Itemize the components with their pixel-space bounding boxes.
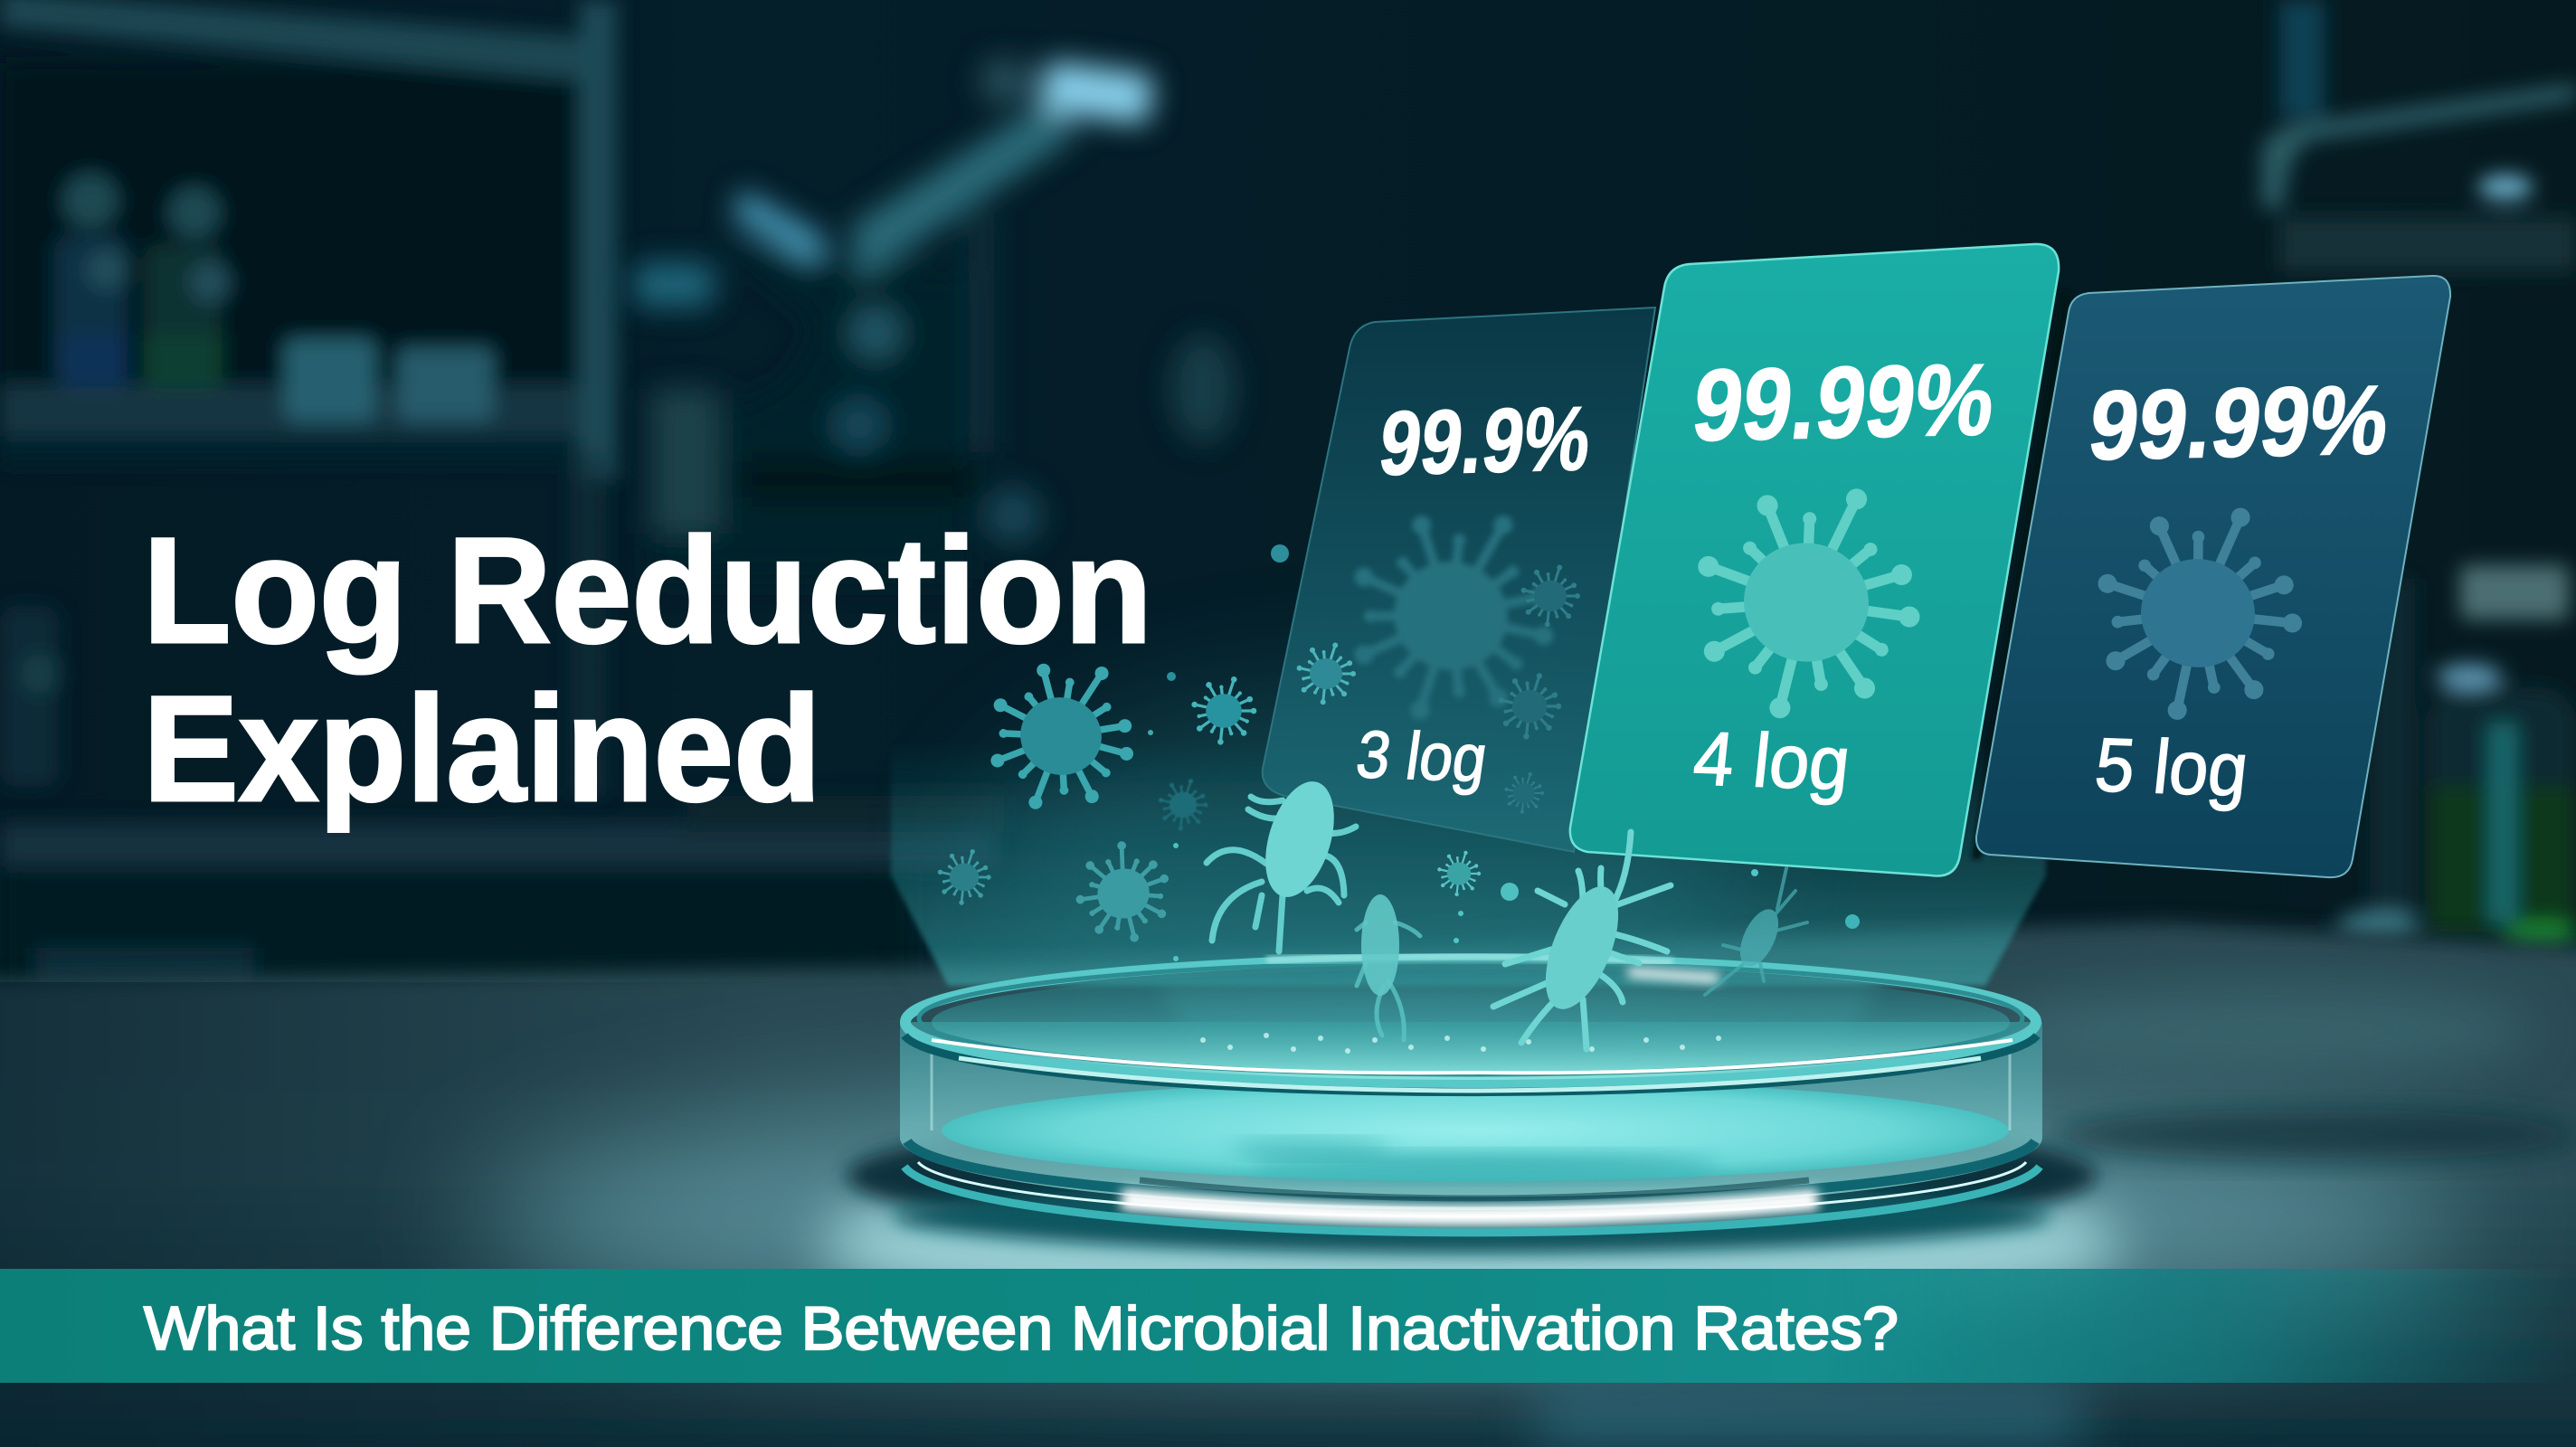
- title: Log Reduction: [143, 507, 1152, 675]
- stat: 99.9%: 99.9%: [1374, 388, 1596, 495]
- background right-hand rack and bottle: [2162, 0, 2576, 977]
- small viruses on card 1: [1300, 568, 1577, 812]
- card: 99.99% / 4 log: [1570, 244, 2059, 876]
- icon: virus on card 2: [1690, 480, 1925, 724]
- label: 3 log: 3 log: [1352, 716, 1492, 796]
- stat: 99.99%: 99.99%: [2083, 364, 2395, 480]
- dish liquid: [942, 1080, 2009, 1181]
- laboratory bench: [0, 922, 2576, 1447]
- small bacterium centre: [1357, 894, 1420, 1040]
- label: 5 log: 5 log: [2091, 722, 2252, 812]
- large bacterium right: [1493, 832, 1671, 1049]
- floating bacterium left: [1207, 773, 1356, 951]
- background shelf unit: [0, 0, 617, 796]
- background microscope: [633, 58, 1236, 579]
- label: 4 log: 4 log: [1690, 715, 1854, 806]
- icon: large virus on card 1: [1340, 499, 1565, 733]
- dish base highlights: [904, 1049, 2040, 1233]
- dish rim: [904, 956, 2037, 1092]
- icon: virus on card 3: [2095, 505, 2303, 722]
- stat: 99.99%: 99.99%: [1687, 342, 2001, 462]
- banner strip: [0, 1269, 2576, 1383]
- dish base and glass wall: [900, 1022, 2042, 1210]
- dish inner surface: [932, 969, 2010, 1081]
- card shadow between cards 2 and 3: [1972, 289, 2071, 859]
- card: 99.99% / 5 log: [1976, 276, 2450, 877]
- card: 99.9% / 3 log: [1263, 307, 1655, 852]
- faint bacterium right: [1705, 868, 1807, 995]
- subtitle: What Is the Difference Between Microbial Inactivation Rates?: [144, 1294, 1899, 1363]
- title: [143, 507, 1152, 833]
- dish sediment speckles: [1200, 1033, 1721, 1054]
- background far bench block: [0, 796, 1004, 993]
- title: Explained: [143, 666, 821, 833]
- hologram light beam: [891, 687, 2046, 1076]
- microbes rising from the dish: [1173, 832, 1860, 1049]
- petri dish: [900, 956, 2042, 1233]
- floating microbes behind the cards: [941, 544, 1289, 950]
